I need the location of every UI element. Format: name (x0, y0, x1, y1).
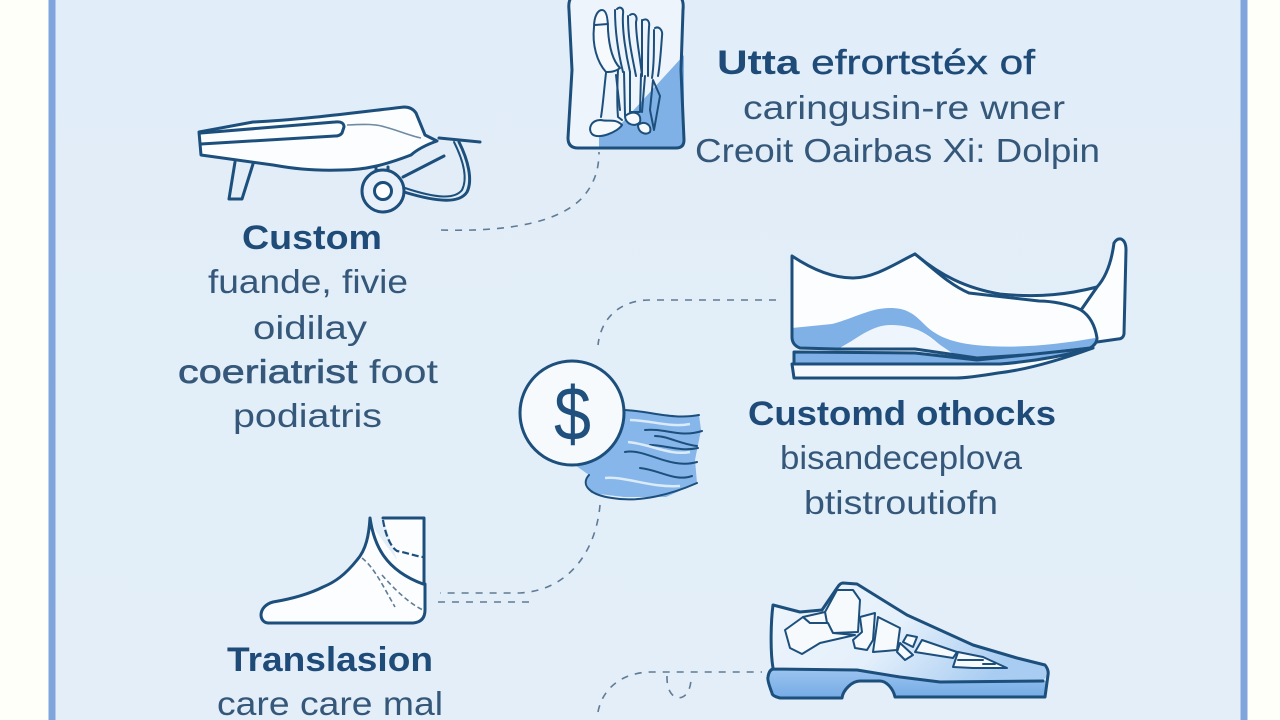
heading: customd othocks: Customd othocks (748, 395, 1056, 433)
connector: bottom shoe (598, 672, 762, 712)
connector: orthotic to coin (598, 300, 776, 345)
icon: dollar coin with banknotes (520, 361, 702, 499)
text: top right line 3: Creoit Oairbas Xi: Dolpin (695, 132, 1100, 169)
icon glyph: dollar sign: $ (554, 372, 591, 457)
text: custom line 1: fuande, fivie (208, 263, 408, 300)
connector: small loop (667, 676, 691, 698)
icon: podiatry chair (199, 107, 480, 212)
icon: shoe with foot bones (768, 583, 1048, 698)
text: custom line 2: oidilay (253, 309, 368, 346)
connector: coin to ankle (440, 505, 600, 593)
heading: top right: Utta efrortstéx of (717, 44, 1036, 82)
text: orthotics line 1: bisandeceplova (780, 439, 1023, 476)
text: orthotics line 2: btistroutiofn (804, 484, 998, 521)
heading: translasion: Translasion (227, 641, 433, 679)
icon: foot x-ray card (568, 0, 684, 148)
text: top right line 2: caringusin-re wner (743, 89, 1065, 126)
icon: ankle and foot (261, 518, 425, 623)
connector: ankle lower dashes (438, 601, 535, 603)
text: custom line 3: coeriatrist foot (178, 353, 438, 390)
text: custom line 4: podiatris (233, 397, 382, 434)
icon: orthotic shoe (792, 239, 1126, 378)
connector: chair to x-ray (441, 152, 599, 230)
heading: custom: Custom (242, 219, 382, 257)
